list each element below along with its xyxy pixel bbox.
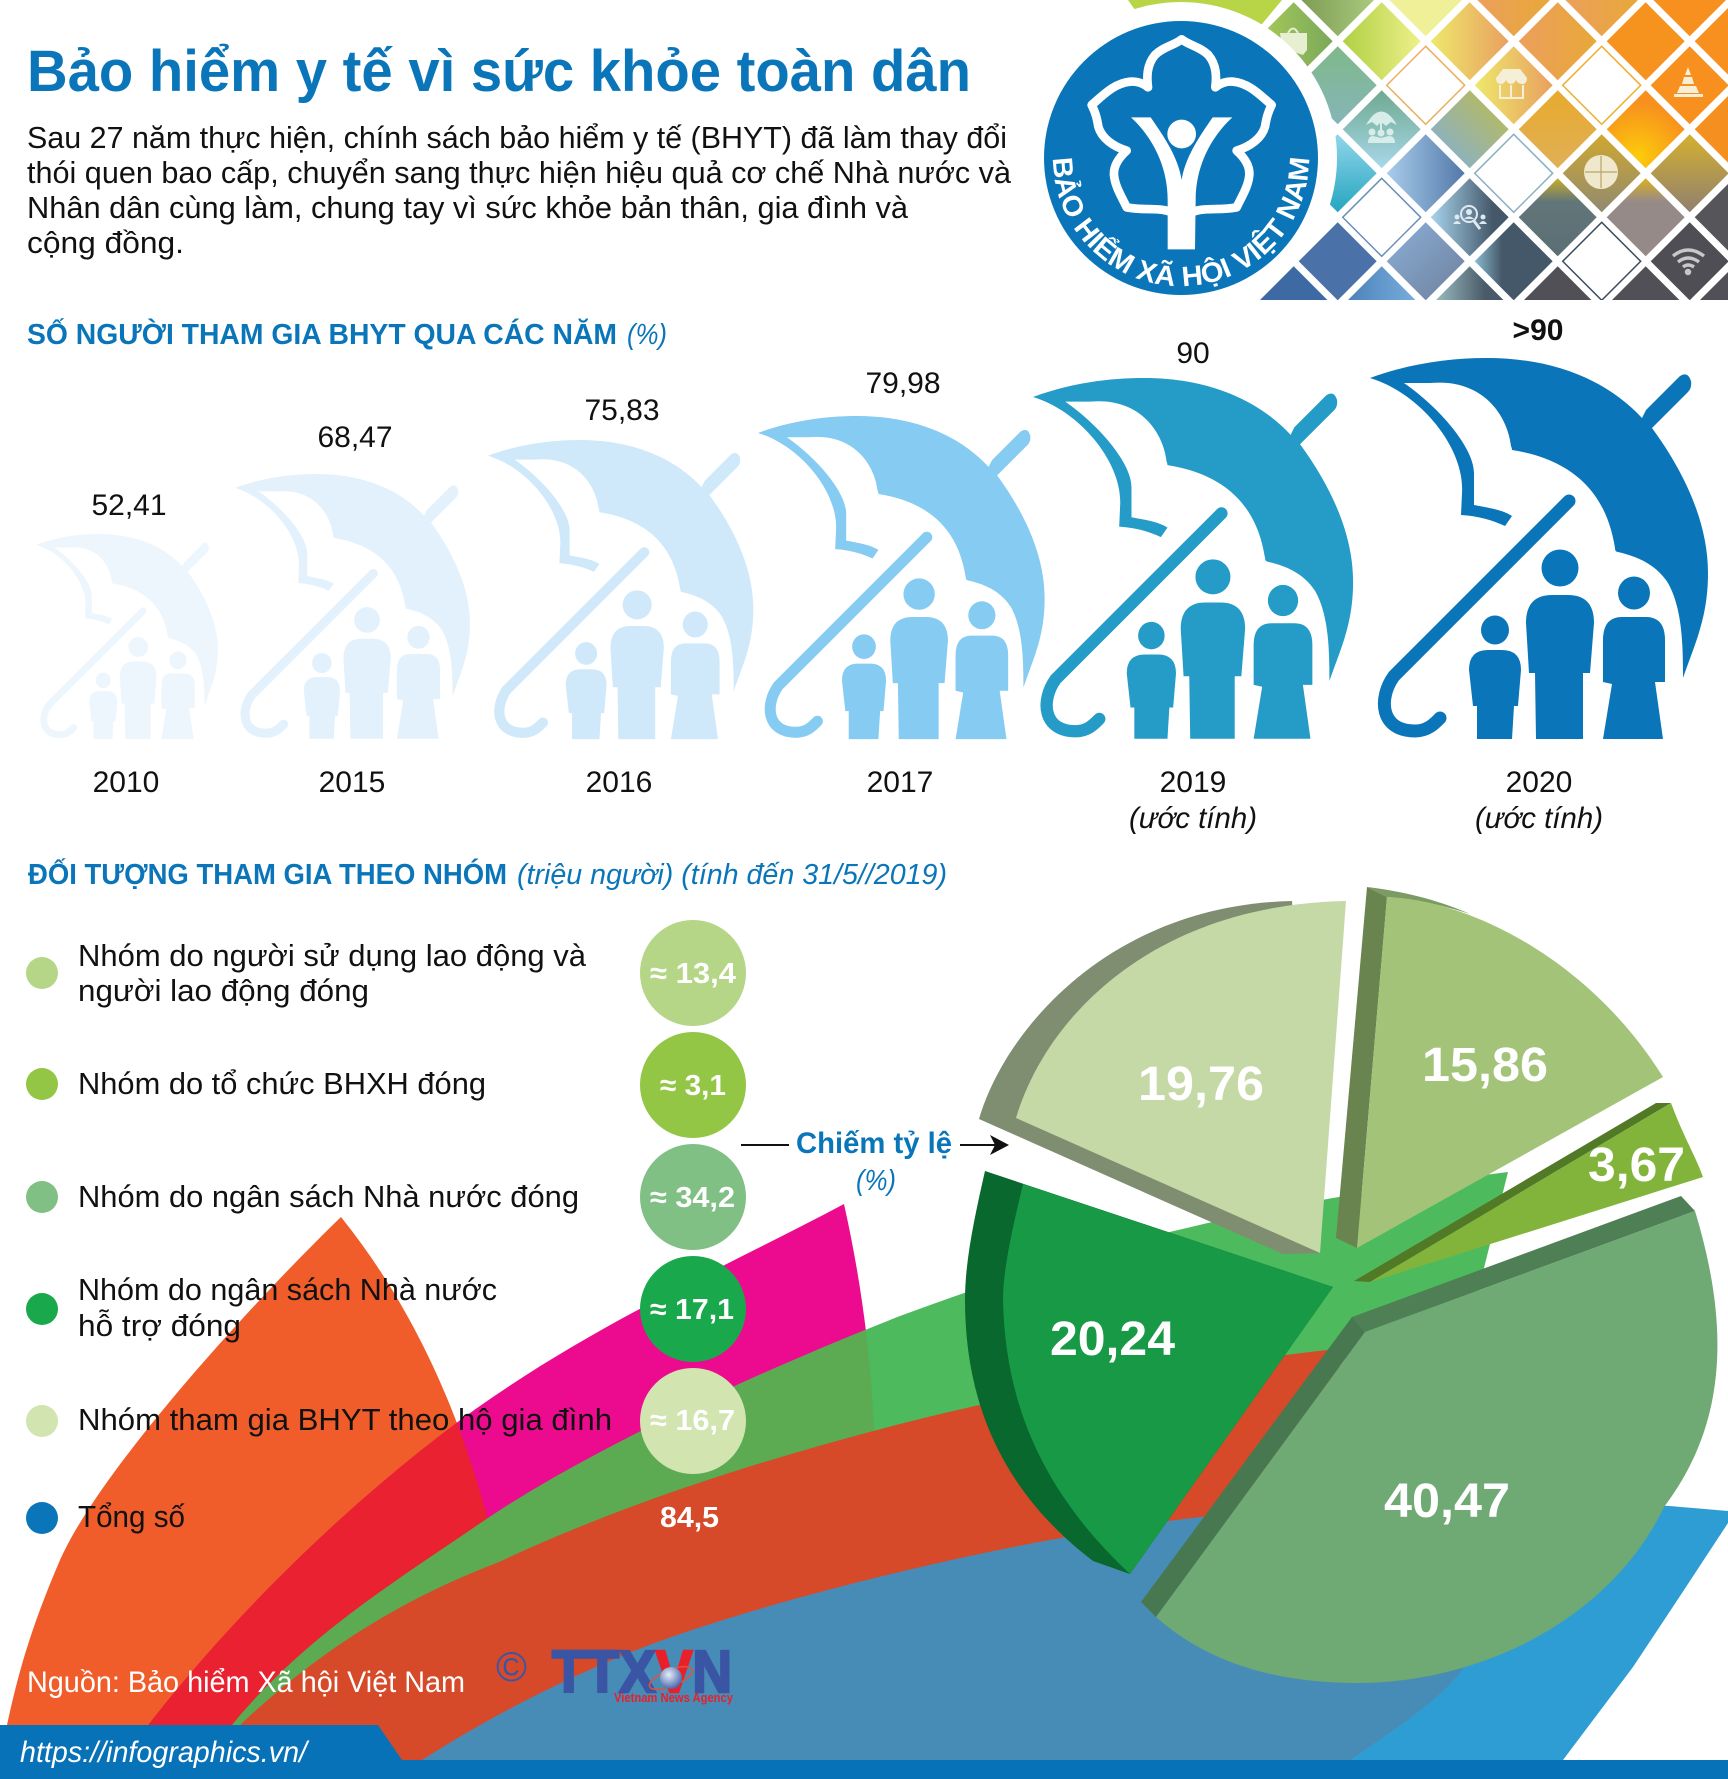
background arcs bbox=[0, 1172, 1728, 1760]
umbrella 2010 bbox=[36, 489, 218, 799]
callout: share arrow: Chiếm tỷ lệ bbox=[796, 1127, 952, 1160]
legend row 1: ≈ 13,4 bbox=[650, 958, 736, 990]
umbrella 2015: 68,47 bbox=[317, 421, 393, 454]
legend row 1 bbox=[26, 920, 746, 1026]
pie slice: 15,86 bbox=[1336, 887, 1663, 1248]
decorative green band bbox=[1128, 0, 1282, 30]
icon: store bbox=[1496, 69, 1527, 98]
logo: TTXVN: Vietnam News Agency bbox=[614, 1691, 733, 1705]
pie slice: 3,67 bbox=[1354, 1103, 1703, 1282]
heading: participation by year: (%) bbox=[627, 319, 667, 351]
pie slice: 20,24 bbox=[965, 1171, 1333, 1574]
legend row 5 bbox=[26, 1368, 746, 1474]
icon: wifi bbox=[1673, 250, 1704, 274]
intro text bbox=[27, 120, 1012, 260]
logo: social insurance: BẢO HIỂM XÃ HỘI VIỆT NAM bbox=[1052, 158, 1310, 287]
legend row 1: người lao động đóng bbox=[78, 973, 369, 1008]
umbrella 2017 bbox=[758, 367, 1045, 799]
umbrella 2010: 2010 bbox=[93, 766, 159, 799]
intro text: cộng đồng. bbox=[27, 225, 184, 260]
intro text: Nhân dân cùng làm, chung tay vì sức khỏe bản thân, gia đình và bbox=[27, 190, 909, 225]
legend row 4: ≈ 17,1 bbox=[650, 1294, 734, 1326]
umbrella 2016: 2016 bbox=[586, 766, 652, 799]
legend row 2 bbox=[26, 1032, 746, 1138]
heading: groups: ĐỐI TƯỢNG THAM GIA THEO NHÓM bbox=[28, 857, 507, 891]
umbrella 2019: 90 bbox=[1176, 337, 1210, 370]
icon: search people bbox=[1453, 206, 1487, 229]
intro text: Sau 27 năm thực hiện, chính sách bảo hiểm y tế (BHYT) đã làm thay đổi bbox=[27, 120, 1007, 155]
pie slice: 3,67: 3,67 bbox=[1588, 1139, 1685, 1192]
umbrella 2020: (ước tính) bbox=[1475, 802, 1603, 835]
legend row 3: Nhóm do ngân sách Nhà nước đóng bbox=[78, 1179, 579, 1214]
footer bar bbox=[0, 1725, 1728, 1779]
pie slice: 19,76: 19,76 bbox=[1138, 1058, 1264, 1111]
legend row 4: hỗ trợ đóng bbox=[78, 1308, 241, 1343]
icon: cone bbox=[1674, 67, 1703, 97]
source text: Nguồn: Bảo hiểm Xã hội Việt Nam bbox=[27, 1666, 465, 1699]
pie slice: 19,76 bbox=[979, 901, 1346, 1254]
umbrella 2020: >90 bbox=[1513, 314, 1563, 347]
legend row 6: Tổng số bbox=[78, 1499, 185, 1534]
legend row 4: Nhóm do ngân sách Nhà nước bbox=[78, 1272, 497, 1307]
legend row 2: Nhóm do tổ chức BHXH đóng bbox=[78, 1066, 486, 1101]
heading: groups bbox=[28, 857, 947, 891]
pie slice: 40,47 bbox=[1141, 1196, 1717, 1683]
umbrella 2016: 75,83 bbox=[584, 394, 660, 427]
callout: share arrow bbox=[741, 1127, 1009, 1197]
umbrella 2019: (ước tính) bbox=[1129, 802, 1257, 835]
decorative diamond pattern bbox=[1260, 0, 1728, 300]
legend row 5: Nhóm tham gia BHYT theo hộ gia đình bbox=[78, 1402, 612, 1437]
umbrella 2010: 52,41 bbox=[91, 489, 167, 522]
legend row 6: 84,5 bbox=[660, 1502, 719, 1534]
umbrella 2016 bbox=[488, 394, 753, 799]
legend row 4 bbox=[26, 1256, 746, 1362]
icon: umbrella people bbox=[1366, 112, 1397, 143]
umbrella 2017: 79,98 bbox=[865, 367, 941, 400]
legend row 3: ≈ 34,2 bbox=[650, 1182, 735, 1214]
legend row 6 bbox=[26, 1499, 719, 1534]
intro text: thói quen bao cấp, chuyển sang thực hiện hiệu quả cơ chế Nhà nước và bbox=[27, 155, 1012, 190]
icon: bag bbox=[1280, 28, 1307, 55]
umbrella 2015 bbox=[235, 421, 470, 799]
legend row 1: Nhóm do người sử dụng lao động và bbox=[78, 938, 587, 973]
pie slice: 40,47: 40,47 bbox=[1384, 1475, 1510, 1528]
footer url: https://infographics.vn/ bbox=[20, 1736, 310, 1769]
umbrella 2019: 2019 bbox=[1160, 766, 1226, 799]
legend row 2: ≈ 3,1 bbox=[660, 1070, 726, 1102]
umbrella 2020: 2020 bbox=[1506, 766, 1572, 799]
pie slice: 15,86: 15,86 bbox=[1422, 1039, 1548, 1092]
umbrella 2017: 2017 bbox=[867, 766, 933, 799]
heading: groups: (triệu người) (tính đến 31/5//2019) bbox=[517, 859, 947, 891]
logo: social insurance bbox=[1044, 2, 1337, 295]
logo: TTXVN: TTXVN bbox=[552, 1639, 732, 1705]
logo: TTXVN: © bbox=[496, 1643, 527, 1690]
pie slice: 20,24: 20,24 bbox=[1050, 1313, 1175, 1366]
legend row 3 bbox=[26, 1144, 746, 1250]
legend row 5: ≈ 16,7 bbox=[650, 1405, 735, 1437]
icon: puzzle bbox=[1584, 155, 1618, 189]
callout: share arrow: (%) bbox=[856, 1165, 896, 1197]
umbrella 2015: 2015 bbox=[319, 766, 385, 799]
umbrella 2019 bbox=[1033, 337, 1353, 835]
heading: participation by year: SỐ NGƯỜI THAM GIA BHYT QUA CÁC NĂM bbox=[27, 317, 617, 351]
title: Bảo hiểm y tế vì sức khỏe toàn dân bbox=[27, 39, 971, 104]
umbrella 2020 bbox=[1370, 314, 1708, 835]
